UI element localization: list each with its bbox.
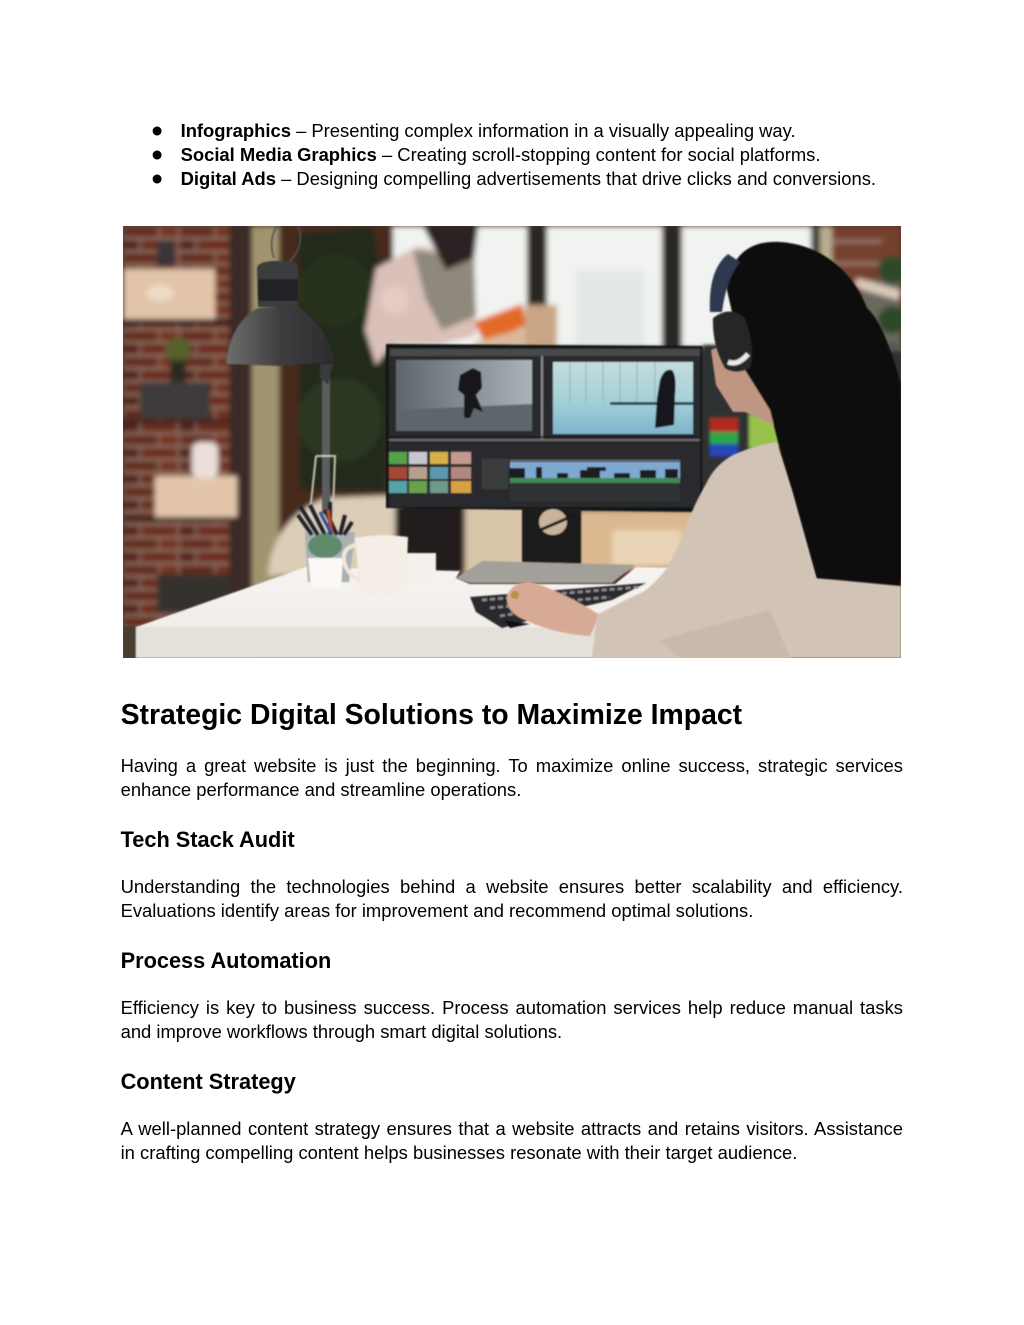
keyboard and hand xyxy=(470,582,646,636)
editor: face and hair xyxy=(710,242,901,586)
paragraph: content strategy: in crafting compelling content helps businesses resonate with their target audience. xyxy=(121,1142,797,1163)
sofa and lower wall xyxy=(268,495,402,580)
paragraph: content strategy: A well-planned content strategy ensures that a website attracts and retains visitors. Assistance xyxy=(121,1118,903,1139)
subheading: tech stack audit: Tech Stack Audit xyxy=(121,827,295,852)
desk xyxy=(123,567,790,658)
paragraph: process automation: and improve workflows through smart digital solutions. xyxy=(121,1021,562,1042)
editor: shirt xyxy=(592,442,901,658)
editor: headphones xyxy=(713,312,752,372)
subheading: content strategy: Content Strategy xyxy=(121,1069,296,1094)
paragraph: process automation: Efficiency is key to business success. Process automation services help reduce manual tasks xyxy=(121,997,903,1018)
paragraph: tech stack audit: Evaluations identify areas for improvement and recommend optimal solutions. xyxy=(121,900,753,921)
blurred background: brick wall, shelves, window, coworker xyxy=(123,226,906,658)
thumbnails xyxy=(389,452,407,464)
monitor xyxy=(386,344,703,512)
second monitor behind the editor xyxy=(701,342,901,489)
bullet: digital ads: Digital Ads – Designing compelling advertisements that drive clicks and conversions. xyxy=(181,168,876,189)
shelves and boxes xyxy=(123,269,215,319)
photo: video editor working at a desktop monitor in a brick office xyxy=(123,226,901,658)
bullet: infographics: ● xyxy=(152,123,162,137)
bullet: infographics: Infographics – Presenting complex information in a visually appealing way. xyxy=(181,120,796,141)
paragraph: content strategy xyxy=(120,1118,903,1163)
desk items: pen holder, plant, mug, box xyxy=(296,501,437,583)
desk lamp xyxy=(226,226,335,514)
bullet: digital ads: ● xyxy=(152,171,162,185)
timeline clips xyxy=(510,462,680,478)
paragraph: tech stack audit xyxy=(121,876,903,921)
subheading: process automation: Process Automation xyxy=(121,948,331,973)
monitor stand xyxy=(456,508,635,583)
section heading: Strategic Digital Solutions to Maximize Impact xyxy=(121,699,742,731)
intro paragraph: enhance performance and streamline operations. xyxy=(121,779,521,800)
bullet: social media graphics: Social Media Graphics – Creating scroll-stopping content for social platforms. xyxy=(181,144,820,165)
bullet list: design services xyxy=(152,120,876,189)
bullet: social media graphics: ● xyxy=(152,147,162,161)
intro paragraph xyxy=(121,755,903,800)
intro paragraph: Having a great website is just the beginning. To maximize online success, strategic services xyxy=(121,755,903,776)
coworker xyxy=(365,246,476,365)
paragraph: process automation xyxy=(121,997,903,1042)
paragraph: tech stack audit: Understanding the technologies behind a website ensures better scalability and efficiency. xyxy=(121,876,903,897)
